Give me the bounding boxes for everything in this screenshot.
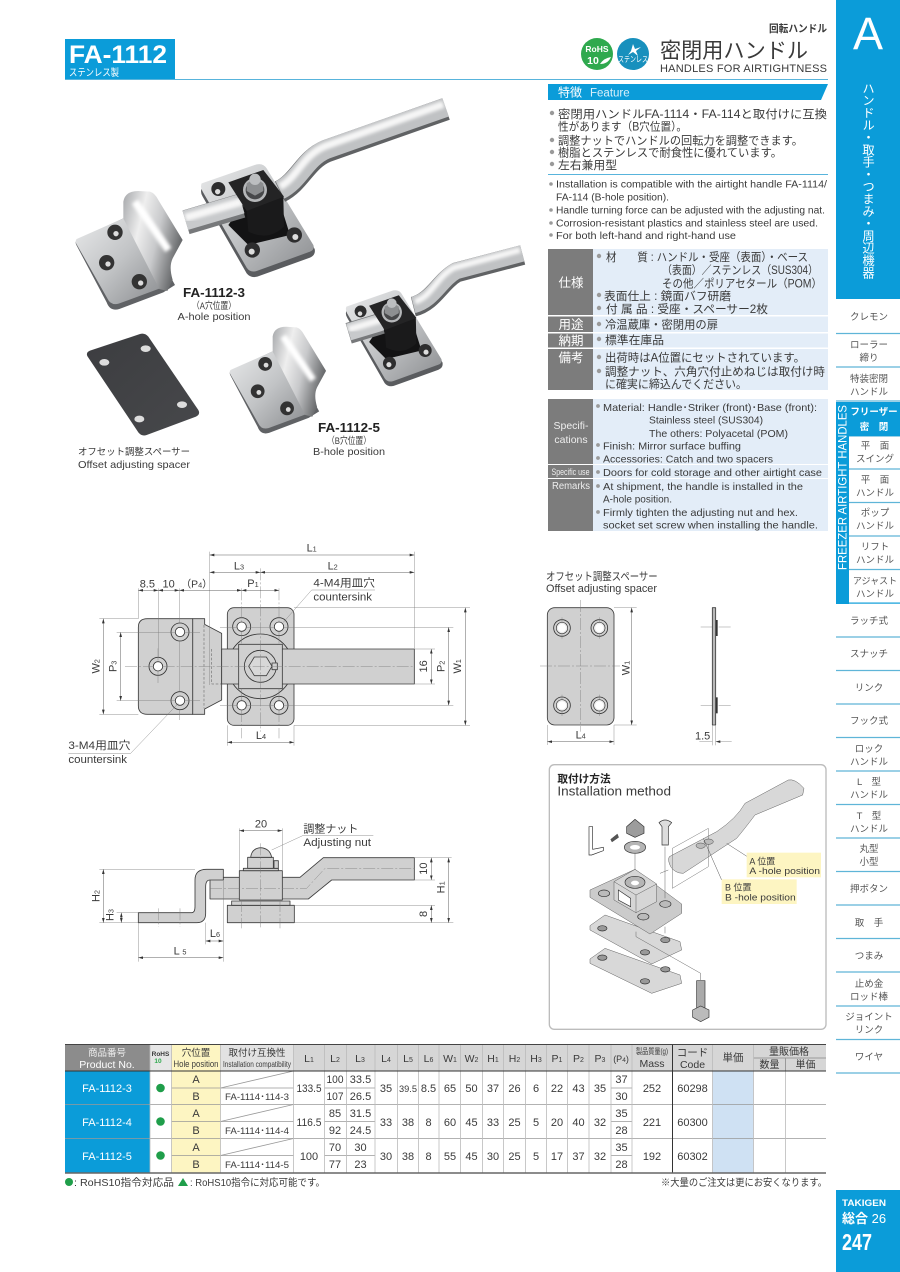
sidebar: navigation list: 丸型 [859, 843, 879, 855]
table header: 製品質量(g) [636, 1046, 668, 1056]
dimension labels: top view [90, 543, 464, 742]
table row: FA-1112-5: 30 [354, 1142, 367, 1154]
table header: W1 [443, 1053, 457, 1065]
sidebar: navigation list: T 型 [857, 811, 882, 822]
table row: FA-1112-5: 23 [354, 1159, 367, 1171]
callout: A position: A 位置 [749, 855, 775, 866]
dimension labels: side view: L 5 [174, 945, 186, 957]
page number block [836, 1190, 900, 1272]
badge: RoHS10: 10 [587, 55, 599, 67]
table row: FA-1112-4: 8 [425, 1117, 432, 1129]
heading: handles for airtightness [660, 22, 827, 75]
table row: FA-1112-4: B [192, 1125, 200, 1137]
text block: features in English: Installation is compatible with the airtight handle FA-1114/ [556, 180, 827, 190]
page number block: TAKIGEN [842, 1198, 886, 1209]
heading: handles for airtightness: 密閉用ハンドル [660, 39, 808, 63]
panel: specifications in English: Accessories: Catch and two spacers [603, 454, 773, 466]
table row: FA-1112-3: 65 [444, 1083, 456, 1095]
table row: FA-1112-5: 28 [615, 1159, 628, 1171]
table row: FA-1112-4: 35 [615, 1108, 628, 1120]
table header: P3 [595, 1053, 606, 1065]
photo caption: FA-1112-5: （B穴位置） [327, 435, 371, 447]
table header: L4 [381, 1053, 391, 1065]
table row: FA-1112-4: 60300 [677, 1117, 708, 1129]
photo caption: FA-1112-3: A-hole position [178, 311, 251, 323]
sidebar: navigation list: 特装密閉 [850, 373, 888, 385]
panel: specifications in Japanese: 調整ナット、六角穴付止めねじは取付け時 [605, 364, 825, 378]
text block: features in Japanese: 調整ナットでハンドルの回転力を調整できます。 [558, 134, 803, 148]
dimension labels: top view: 10 [163, 579, 175, 591]
panel: specifications in Japanese: 標準在庫品 [605, 333, 664, 347]
drawing: striker outline [138, 619, 222, 714]
drawing: top view dimensions [68, 543, 470, 766]
sidebar: navigation list: ジョイント [845, 1012, 893, 1023]
photo caption: FA-1112-3 [178, 285, 251, 323]
table row: FA-1112-4 [82, 1108, 708, 1137]
dimension labels: top view: 8.5 [140, 579, 155, 591]
callout: A position [727, 843, 821, 877]
header: product title bar: FA-1112 [69, 41, 167, 69]
dimension labels: top view: P2 [435, 661, 447, 672]
table row: FA-1112-5: 17 [551, 1151, 563, 1163]
table row: FA-1112-3: 26 [508, 1083, 521, 1095]
text block: features in English: FA-114 (B-hole position). [556, 192, 669, 204]
text block: features in English: Corrosion-resistant plastics and stainless steel are used. [556, 218, 818, 230]
spacer dimensions [547, 608, 732, 742]
text block: features in English: Handle turning force can be adjusted with the adjusting nat. [556, 206, 825, 216]
dimension labels: top view: L1 [307, 543, 317, 555]
sidebar: navigation list: 平 面 [861, 441, 889, 452]
panel: specifications in English: Material: Handle･Striker (front)･Base (front): [603, 402, 817, 414]
table header: H1 [487, 1053, 499, 1065]
callout: A position: A -hole position [749, 866, 820, 876]
table row: FA-1112-4: 116.5 [296, 1117, 322, 1129]
table row: FA-1112-3: 33.5 [350, 1074, 371, 1086]
sidebar: navigation list: ポップ [861, 508, 890, 519]
table header: L2 [330, 1053, 340, 1065]
table row: FA-1112-4: 221 [643, 1117, 661, 1129]
dimension labels: side view: L6 [210, 928, 220, 940]
caption: offset adjusting spacer: オフセット調整スペーサー [546, 569, 658, 583]
dimension labels: side view: 10 [418, 863, 430, 875]
dimension labels: side view [90, 819, 447, 957]
sidebar: navigation list: ハンドル [850, 387, 888, 398]
sidebar: navigation list: 押ボタン [850, 883, 888, 895]
sidebar: navigation list: ハンドル [850, 790, 888, 801]
table row: FA-1112-4: 20 [551, 1117, 563, 1129]
table row: FA-1112-5: 30 [487, 1151, 499, 1163]
header: product title bar: ステンレス製 [69, 66, 119, 79]
table row: FA-1112-5 [82, 1142, 708, 1171]
dimension labels: side view: 8 [418, 911, 430, 917]
sidebar: navigation list: ラッチ式 [850, 615, 888, 627]
table row: FA-1112-4: FA-1112-4 [82, 1117, 132, 1129]
panel: specifications in Japanese: 表面仕上 : 鏡面バフ研磨 [604, 289, 731, 303]
dimension labels: top view: （P4） [181, 579, 212, 591]
sidebar: category tab A [836, 0, 900, 299]
panel: specifications in English: Stainless steel (SUS304) [649, 414, 763, 426]
sidebar: navigation list: ローラー [850, 340, 888, 351]
table header: Product No. [79, 1059, 135, 1071]
table header: コード [677, 1047, 708, 1059]
page number block: 総合 26 [842, 1211, 886, 1226]
heading: handles for airtightness: 回転ハンドル [769, 22, 827, 35]
table row: FA-1112-4: 25 [508, 1117, 521, 1129]
table row: FA-1112-3: 39.5 [399, 1084, 417, 1094]
sidebar: navigation list: ハンドル [850, 824, 888, 835]
table row: FA-1112-4: 33 [487, 1117, 499, 1129]
panel: specifications in Japanese: その他／ポリアセタール（POM） [662, 278, 822, 290]
sidebar: navigation list: ハンドル [856, 488, 894, 499]
sidebar: navigation list: リンク [855, 683, 883, 694]
panel: feature heading [548, 84, 828, 100]
table header: 量販価格 [769, 1045, 809, 1058]
photo: offset spacer [87, 334, 199, 435]
table row: FA-1112-5: 45 [465, 1151, 478, 1163]
text block: features in Japanese: 性があります（B穴位置）。 [558, 120, 687, 134]
table row: FA-1112-4: 92 [329, 1125, 341, 1137]
drawing: side view parts [138, 848, 414, 923]
panel: specifications in Japanese: 備考 [558, 351, 584, 365]
sidebar: navigation list: 取 手 [855, 917, 884, 929]
panel: specifications in Japanese: 付 属 品 : 受座・スペーサー2枚 [606, 302, 768, 316]
panel: installation method [549, 765, 826, 1029]
panel: specifications in English: Remarks [552, 481, 590, 492]
table header: L3 [355, 1053, 365, 1065]
table footnote: bulk order note: ※大量のご注文は更にお安くなります。 [661, 1176, 827, 1189]
sidebar: navigation list [836, 312, 900, 1073]
table header: H3 [530, 1053, 542, 1065]
table row: FA-1112-5: A [192, 1142, 200, 1154]
table row: FA-1112-3: 60298 [677, 1083, 708, 1095]
table row: FA-1112-3: A [192, 1074, 200, 1086]
sidebar: navigation list: ハンドル [856, 521, 894, 532]
sidebar: navigation list: ロック [855, 744, 883, 755]
photo caption: offset spacer: Offset adjusting spacer [78, 459, 191, 471]
panel: specifications in English [548, 399, 828, 532]
callout: adjusting nut [272, 822, 373, 850]
table row: FA-1112-5: FA-1112-5 [82, 1151, 132, 1163]
photo caption: FA-1112-3: FA-1112-3 [183, 285, 245, 300]
sidebar: navigation list: ハンドル [856, 589, 894, 600]
table row: FA-1112-5: FA-1114･114-5 [225, 1160, 289, 1171]
photo: striker FA-1112-3 [76, 191, 183, 310]
callout: 4-M4 countersink: 4-M4用皿穴 [313, 577, 375, 590]
photo caption: FA-1112-5 [313, 420, 385, 458]
caption: offset adjusting spacer [546, 569, 658, 595]
sidebar: navigation list: つまみ [855, 951, 883, 962]
table row: FA-1112-4: FA-1114･114-4 [225, 1126, 289, 1137]
callout: 4-M4 countersink [283, 577, 375, 622]
text block: features in English: For both left-hand and right-hand use [556, 231, 736, 242]
panel: specifications in Japanese: に確実に締込んでください。 [605, 377, 747, 391]
photo: handle FA-1112-3 [185, 104, 446, 277]
table row: FA-1112-5: 37 [572, 1151, 585, 1163]
table row: FA-1112-5: 25 [508, 1151, 521, 1163]
badge: RoHS10: RoHS [585, 44, 609, 54]
drawing: base plate and handle [222, 608, 414, 725]
table header: 数量 [760, 1058, 780, 1071]
dimension labels: side view: 20 [255, 819, 267, 831]
table row: FA-1112-3: 43 [572, 1083, 585, 1095]
table row: FA-1112-4: 85 [329, 1108, 341, 1120]
spacer dimensions: 1.5 [695, 730, 710, 742]
callout: B position: B 位置 [725, 881, 751, 892]
table row: FA-1112-5: 5 [533, 1151, 539, 1163]
table row: FA-1112-5: 77 [329, 1159, 341, 1171]
caption: offset adjusting spacer: Offset adjusting spacer [546, 583, 657, 595]
dimension labels: top view: P3 [108, 661, 120, 672]
badge: stainless: ステンレス [618, 55, 648, 64]
table row: FA-1112-3: 37 [615, 1074, 628, 1086]
table row: FA-1112-3: 30 [615, 1091, 628, 1103]
sidebar: navigation list: ワイヤ [855, 1052, 883, 1063]
panel: specifications in English: At shipment, the handle is installed in the [603, 481, 803, 493]
table row: FA-1112-5: 32 [594, 1151, 606, 1163]
table header [65, 1045, 826, 1071]
table footnote: RoHS legend: : RoHS10指令対応品 [74, 1176, 174, 1189]
table row: FA-1112-4: 5 [533, 1117, 539, 1129]
spacer dimensions: W1 [621, 661, 633, 675]
sidebar: navigation list: ハンドル [856, 555, 894, 566]
table header: 穴位置 [182, 1047, 211, 1059]
sidebar: category tab A: ハンドル・取手・つまみ・周辺機器 [860, 82, 875, 279]
photo caption: offset spacer: オフセット調整スペーサー [78, 446, 190, 458]
table row: FA-1112-4: 38 [402, 1117, 414, 1129]
table header: P1 [552, 1053, 563, 1065]
callout: adjusting nut: 調整ナット [303, 822, 358, 836]
dimension labels: top view: L3 [234, 560, 244, 572]
sidebar: navigation list: リフト [861, 542, 889, 553]
sidebar: navigation list: ハンドル [850, 757, 888, 768]
table row: FA-1112-5: 8 [425, 1151, 432, 1163]
table header: L5 [403, 1053, 413, 1065]
table row: FA-1112-5: 35 [615, 1142, 628, 1154]
table row: FA-1112-4: 31.5 [350, 1108, 371, 1120]
panel: specifications in English: The others: Polyacetal (POM) [649, 428, 788, 440]
heading: installation method: Installation method [557, 783, 671, 798]
table row: FA-1112-5: 55 [444, 1151, 456, 1163]
drawing: offset adjusting spacer [540, 569, 732, 745]
panel: feature heading: 特徴 [558, 84, 582, 100]
panel: specifications in English: cations [554, 434, 588, 446]
drawing: side view dimensions [90, 819, 453, 962]
callout: B position: B -hole position [725, 892, 796, 902]
table footnote: RoHS legend [65, 1176, 325, 1189]
table row: FA-1112-5: 100 [300, 1151, 318, 1163]
page number block: 247 [842, 1229, 872, 1255]
table header: 単価 [722, 1051, 744, 1064]
sidebar: navigation list: FREEZER AIRTIGHT HANDLES [838, 405, 850, 570]
heading: installation method: 取付け方法 [557, 773, 611, 786]
panel: specifications in Japanese: 用途 [558, 318, 584, 332]
panel: specifications in English: A-hole position. [603, 494, 672, 506]
table row: FA-1112-5: 38 [402, 1151, 414, 1163]
callout: adjusting nut: Adjusting nut [303, 837, 371, 849]
text block: features in English [549, 180, 827, 242]
callout: 3-M4 countersink [68, 703, 178, 766]
table header: P2 [573, 1053, 584, 1065]
table row: FA-1112-3: 100 [326, 1074, 344, 1086]
table row: FA-1112-4: 40 [572, 1117, 585, 1129]
dimension labels: top view: W1 [452, 659, 464, 674]
table header: 取付け互換性 [228, 1047, 286, 1059]
callout: 3-M4 countersink: countersink [68, 754, 128, 766]
sidebar: navigation list: ロッド棒 [850, 991, 888, 1003]
panel: specifications in English: Specific use [552, 467, 590, 477]
spacer front view [547, 608, 614, 725]
photo caption: FA-1112-5: B-hole position [313, 446, 385, 458]
table row: FA-1112-3: B [192, 1091, 200, 1103]
photo: handle FA-1112-5 [346, 250, 523, 386]
dimension labels: top view: W2 [90, 659, 102, 674]
spacer side view [712, 608, 718, 725]
panel: specifications in Japanese [548, 249, 828, 391]
sidebar: navigation list: リンク [855, 1025, 883, 1036]
table row: FA-1112-3: 35 [380, 1083, 392, 1095]
dimension labels: side view: H1 [435, 881, 447, 893]
table row: FA-1112-5: 192 [643, 1151, 661, 1163]
callout: B position [703, 838, 797, 904]
photo: products [76, 104, 523, 435]
table header: 10 [154, 1058, 162, 1065]
panel: specifications in Japanese: 仕様 [558, 275, 584, 290]
table header: Hole position [174, 1059, 218, 1069]
dimension labels: top view: P1 [247, 578, 259, 590]
table row: FA-1112-3: FA-1112-3 [82, 1083, 132, 1095]
table row: FA-1112-3: 35 [594, 1083, 606, 1095]
sidebar: category tab A: A [853, 8, 883, 59]
table row: FA-1112-4: 32 [594, 1117, 606, 1129]
dimension labels: side view: H2 [90, 890, 102, 902]
diagram: exploded assembly [589, 780, 804, 1022]
dimension lines: top view [103, 555, 465, 742]
dimension labels: top view: L4 [256, 730, 266, 742]
panel: specifications in English: socket set screw when installing the handle. [603, 520, 818, 532]
dimension labels: top view: 16 [418, 660, 430, 672]
sidebar: navigation list: スイング [856, 453, 894, 465]
table header: (P4) [613, 1054, 629, 1064]
table row: FA-1112-3: 252 [643, 1083, 661, 1095]
sidebar: navigation list: 小型 [859, 857, 879, 868]
sidebar: navigation list: スナッチ [850, 649, 888, 660]
table: dimensions [65, 1044, 826, 1173]
heading: handles for airtightness: HANDLES FOR AIRTIGHTNESS [660, 63, 827, 75]
table header: Code [680, 1059, 705, 1071]
sidebar: navigation list: 止め金 [855, 978, 884, 990]
dimension labels: side view: H3 [104, 909, 116, 921]
table header: RoHS [152, 1051, 170, 1058]
panel: specifications in Japanese: （表面）／ステンレス（SUS304） [662, 264, 818, 277]
badge: RoHS10 [581, 38, 613, 70]
photo caption: offset spacer [78, 446, 191, 471]
text block: features in Japanese: 樹脂とステンレスで耐食性に優れています。 [558, 146, 782, 160]
table row: FA-1112-5: 70 [329, 1142, 341, 1154]
table header: Installation compatibility [223, 1060, 291, 1069]
table row: FA-1112-3: FA-1114･114-3 [225, 1092, 289, 1103]
table footnote: RoHS legend: : RoHS10指令に対応可能です。 [190, 1176, 325, 1189]
photo: striker FA-1112-5 [230, 327, 326, 433]
dimension labels: top view: L2 [328, 560, 338, 572]
panel: specifications in English: Finish: Mirror surface buffing [603, 440, 741, 452]
table row: FA-1112-3: 133.5 [296, 1083, 322, 1095]
panel: specifications in English: Firmly tighten the adjusting nut and hex. [603, 507, 798, 519]
sidebar: navigation list: フリーザー [850, 407, 898, 418]
table row: FA-1112-3: 6 [533, 1083, 539, 1095]
table row: FA-1112-3: 37 [487, 1083, 499, 1095]
table row: FA-1112-3 [82, 1074, 708, 1103]
table row: FA-1112-5: 30 [380, 1151, 392, 1163]
table row: FA-1112-3: 50 [465, 1083, 478, 1095]
panel: specifications in Japanese: 冷温蔵庫・密閉用の扉 [605, 318, 718, 332]
callout: 4-M4 countersink: countersink [313, 591, 373, 603]
table row: FA-1112-3: 107 [326, 1091, 344, 1103]
callout: 3-M4 countersink: 3-M4用皿穴 [68, 739, 130, 752]
dimension lines: side view [103, 831, 449, 958]
sidebar: navigation list: 締り [859, 352, 879, 364]
photo caption: FA-1112-5: FA-1112-5 [318, 420, 380, 435]
sidebar: navigation list: 平 面 [861, 475, 889, 486]
table row: FA-1112-3: 8.5 [421, 1083, 436, 1095]
table header: L1 [304, 1053, 314, 1065]
table row: FA-1112-4: 28 [615, 1125, 628, 1137]
table row: FA-1112-4: 33 [380, 1117, 392, 1129]
table row: FA-1112-4: 24.5 [350, 1125, 371, 1137]
panel: specifications in Japanese: 出荷時はA位置にセットされています。 [605, 352, 805, 364]
table grid [65, 1044, 826, 1173]
table row: FA-1112-3: 26.5 [350, 1091, 371, 1103]
sidebar: navigation list: フック式 [850, 715, 888, 727]
table header: H2 [509, 1053, 520, 1065]
header: product title bar [65, 39, 828, 80]
heading: installation method [557, 773, 671, 798]
text block: features in Japanese: 密閉用ハンドルFA-1114・FA-114と取付けに互換 [558, 107, 828, 121]
table row: FA-1112-5: 60302 [677, 1151, 708, 1163]
sidebar: navigation list: アジャスト [853, 576, 897, 586]
panel: specifications in Japanese: 材 質 : ハンドル・受座（表面）・ベース [606, 250, 808, 264]
table header: W2 [465, 1053, 479, 1065]
sidebar: navigation list: クレモン [850, 312, 888, 323]
table row: FA-1112-3: 22 [551, 1083, 563, 1095]
table row: FA-1112-4: A [192, 1108, 200, 1120]
photo caption: FA-1112-3: （A穴位置） [192, 300, 236, 312]
panel: specifications in English: Specifi- [553, 420, 589, 432]
table row: FA-1112-5: B [192, 1159, 200, 1171]
sidebar: navigation list: 密 閉 [860, 421, 888, 433]
table row: FA-1112-4: 60 [444, 1117, 456, 1129]
panel: feature heading: Feature [590, 88, 630, 100]
spacer dimensions: L4 [576, 730, 586, 742]
table header: Mass [639, 1058, 665, 1070]
panel: specifications in English: Doors for cold storage and other airtight case [603, 467, 822, 479]
sidebar: navigation list: L 型 [857, 777, 881, 788]
table body fills [65, 1071, 754, 1173]
badge: stainless [617, 38, 649, 70]
panel: specifications in Japanese: 納期 [558, 333, 584, 348]
table row: FA-1112-4: 45 [465, 1117, 478, 1129]
text block: features in Japanese: 左右兼用型 [558, 158, 617, 172]
text block: features in Japanese [550, 107, 828, 172]
table header: 単価 [796, 1058, 816, 1071]
table header: L6 [424, 1053, 433, 1065]
table header: 商品番号 [88, 1047, 126, 1059]
